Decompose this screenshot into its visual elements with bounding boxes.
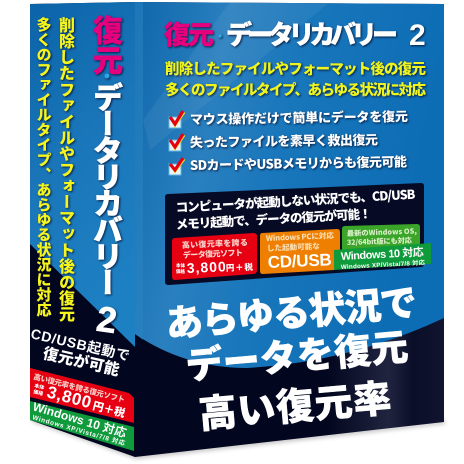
windows card: Windows XP/Vista/7/8 対応	[341, 259, 426, 271]
windows card: 32/64bit版にも対応	[347, 236, 413, 248]
spine price badge: 円＋税	[91, 397, 127, 421]
main catchphrase: 高い復元率	[196, 367, 393, 439]
feature text: 失ったファイルを素早く救出復元	[190, 129, 378, 151]
black panel	[165, 183, 431, 285]
spine boot text: 復元が可能	[41, 341, 122, 381]
feature text: SDカードやUSBメモリからも復元可能	[190, 151, 407, 174]
spine price badge: 高い復元率を誇る復元ソフト	[32, 371, 126, 405]
feature text	[190, 106, 408, 174]
spine title: 2	[94, 298, 120, 341]
icon: check 3	[169, 158, 184, 175]
front title	[164, 15, 426, 52]
price card: データ復元ソフト	[183, 247, 243, 261]
front yellow tagline: 削除したファイルやフォーマット後の復元	[165, 58, 426, 79]
spine title: データリカバリー	[86, 82, 130, 295]
main catchphrase	[163, 272, 419, 439]
spine windows badge: Windows XP/Vista/7/8 対応	[31, 412, 127, 448]
panel headline: コンピュータが起動しない状況でも、CD/USB	[175, 184, 416, 216]
CD/USB card: CD/USB	[267, 250, 332, 272]
windows card: 最新のWindows OS,	[347, 227, 418, 239]
panel: box front	[135, 2, 444, 457]
windows card	[334, 224, 431, 271]
spine boot text: CD/USB起動で	[29, 325, 131, 364]
front title: 復元	[164, 15, 214, 52]
price card: 高い復元率を誇る	[182, 237, 248, 251]
panel headline: メモリ起動で、データの復元が可能！	[175, 203, 372, 233]
icon: check 2	[169, 134, 184, 151]
price card	[172, 233, 257, 280]
CD/USB card	[260, 229, 340, 274]
front title: データリカバリー	[226, 15, 398, 52]
panel headline	[175, 184, 416, 233]
front yellow tagline	[165, 58, 426, 100]
spine boot text	[29, 325, 131, 381]
main catchphrase: データを復元	[183, 317, 410, 390]
icon: check 1	[169, 111, 184, 128]
price card: 3,800	[186, 258, 226, 276]
spine price badge	[30, 368, 134, 423]
spine windows badge: Windows 10 対応	[31, 398, 128, 440]
spine price badge: 3,800	[45, 382, 93, 412]
spine title	[86, 15, 130, 341]
spine title: 復元	[86, 15, 130, 75]
feature checklist	[169, 106, 408, 175]
CD/USB card: した起動可能な	[267, 241, 320, 254]
front yellow tagline: 多くのファイルタイプ、あらゆる状況に対応	[165, 79, 426, 100]
CD/USB card: Windows PCに対応	[266, 230, 334, 244]
spine price badge: 本体	[33, 382, 45, 391]
feature text: マウス操作だけで簡単にデータを復元	[190, 106, 408, 128]
spine yellow tagline column 1: 削除したファイルやフォーマット後の復元	[55, 16, 79, 323]
price card: 円＋税	[226, 261, 254, 274]
front title: 2	[409, 19, 426, 52]
price card: 本体	[176, 262, 185, 269]
spine yellow tagline column 2: 多くのファイルタイプ、あらゆる状況に対応	[34, 16, 54, 318]
spine price badge: 価格	[32, 388, 44, 397]
windows card: Windows 10 対応	[340, 245, 424, 263]
panel: box spine	[29, 2, 135, 457]
box drop shadow	[32, 418, 445, 459]
main catchphrase: あらゆる状況で	[163, 272, 419, 348]
price card: 価格	[176, 268, 185, 275]
